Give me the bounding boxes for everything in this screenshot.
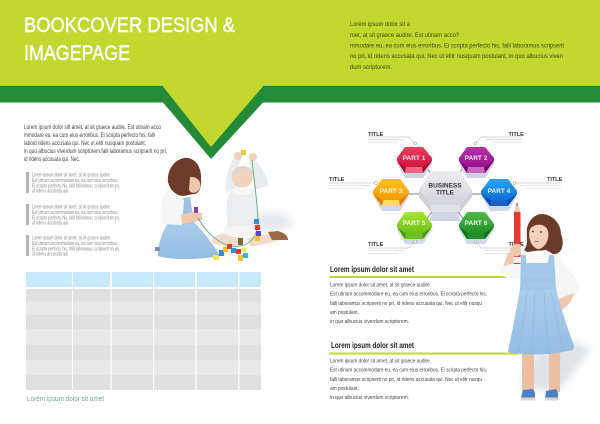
section 1: falli laboramus scripserit no pri, id ridens accusata qui. Nec ut elitr nusqu [330, 301, 482, 307]
part 1 hexagon [397, 147, 432, 178]
cast shadow [520, 342, 590, 392]
part 2 hexagon: PART 2 [465, 155, 488, 162]
side note 3: id ridens accusata qui. [32, 252, 69, 258]
side note 3: Lorem ipsum dolor sit amet, at sit graece audire. [32, 236, 111, 242]
section 1 [329, 264, 519, 325]
part 4 hexagon: PART 4 [488, 188, 511, 195]
table rows [26, 289, 261, 302]
face [529, 225, 548, 249]
callout: top right [474, 132, 524, 145]
part 5 hexagon: PART 5 [403, 220, 426, 227]
baby legs [212, 233, 242, 246]
header text block [350, 21, 564, 71]
header band [0, 0, 600, 85]
legs [522, 350, 534, 392]
intro paragraph: in quo albucius viverdum scriptorem.falli laboramus scripserit no pri, [24, 149, 167, 155]
baby body [226, 187, 257, 226]
section 1: Lorem ipsum dolor sit amet, at sit graece audire. [330, 282, 431, 288]
section 2: Est utinam accommodare eu, ea cum eius erroribus. Ei scripta perfecto his, [330, 368, 487, 374]
callout: middle right: TITLE [547, 177, 563, 183]
photo: girl with big red pencil [500, 202, 590, 400]
intro paragraph: mmodare eu, ea cum eius erroribus. Ei scripta perfecto his, falli [24, 133, 155, 139]
shirt and right sleeve [522, 252, 580, 298]
photo: two children playing with beads [155, 150, 292, 261]
table header [26, 272, 261, 287]
intro paragraph: Lorem ipsum dolor sitt amet, at sit graece audire. Est utinam acco [24, 125, 162, 131]
bib and straps [520, 255, 556, 290]
baby hands [234, 152, 242, 160]
callout: top left [368, 132, 416, 145]
center hexagon [419, 171, 472, 221]
section 2: in quo albucius viverdum scriptorem. [330, 395, 409, 401]
side note 3 [26, 235, 120, 258]
side note 1: id ridens accusata qui. [32, 188, 69, 194]
center hexagon: TITLE [436, 190, 455, 196]
section 1: am postulant, [330, 310, 359, 316]
bead in girl's hand [194, 207, 198, 213]
callout: middle right [513, 177, 563, 189]
hair [524, 214, 563, 254]
baby shoes [268, 231, 288, 240]
eyes and mouth [532, 231, 542, 242]
callout: middle left: TITLE [329, 177, 345, 183]
section 2: Lorem ipsum dolor sit amet [331, 340, 414, 350]
girl hair [168, 158, 201, 196]
side note 3: Est utinam accommodare eu, ea cum eius erroribus. [32, 241, 118, 247]
section 2: am postulant, [330, 386, 359, 392]
pencil [514, 202, 520, 264]
table caption: Lorem ipsum dolor sit amet [27, 394, 105, 403]
header text block: mmodare eu, ea cum eius erroribus. Ei scripta perfecto his, falli laboramus scripserit [350, 42, 564, 50]
side note 1: Ei scripta perfecto his, falli laboramus scripserit no pri, [32, 184, 120, 190]
girl foot [155, 247, 160, 251]
center hexagon: BUSINESS [428, 182, 462, 190]
section 2: Lorem ipsum dolor sit amet, at sit graece audire. [330, 358, 431, 364]
connectors [405, 168, 485, 220]
hexagon diagram [329, 132, 563, 254]
part 2 hexagon [459, 147, 494, 178]
header text block: Lorem ipsum dolor sit a [350, 21, 410, 28]
part 4 hexagon [481, 179, 517, 211]
header text block: dum scriptorem. [350, 64, 392, 71]
section 1: Lorem ipsum dolor sit amet [330, 264, 414, 274]
intro paragraph: laboid ridens accusata qui. Nec ut elitr nusquam postulant, [24, 141, 146, 147]
girl arm and hand [181, 212, 202, 224]
header text block: met, at sit graece audire. Est utinam acco? [350, 32, 459, 39]
side note 2: id ridens accusata qui. [32, 220, 69, 226]
left sleeve [500, 264, 524, 278]
hand on hip [549, 293, 574, 311]
skirt pleats [519, 280, 563, 354]
bead string [198, 160, 258, 246]
side note 1: Lorem ipsum dolor sit amet, at sit graece audire. [32, 172, 111, 178]
collar [527, 251, 550, 261]
shoes [521, 389, 535, 399]
side note 1: Est utinam accommodare eu, ea cum eius erroribus. [32, 178, 118, 184]
title: IMAGEPAGE [24, 42, 130, 65]
side note 3: Ei scripta perfecto his, falli laboramus scripserit no pri, [32, 246, 120, 252]
part 3 hexagon [373, 179, 409, 211]
data table [26, 272, 261, 390]
girl skirt [158, 220, 220, 259]
pencil hand [510, 244, 521, 256]
toy in hands [241, 150, 246, 155]
section 2 [329, 340, 519, 401]
part 6 hexagon [459, 212, 494, 244]
title: BOOKCOVER DESIGN & [24, 14, 235, 37]
callout: middle left [329, 177, 378, 189]
section 1: Est utinam accommodare eu, ea cum eius erroribus. Ei scripta perfecto his, [330, 292, 487, 298]
side note 2: Est utinam accommodare eu, ea cum eius erroribus. [32, 210, 118, 216]
callout: bottom left [368, 240, 416, 254]
side note 1 [26, 172, 120, 194]
part 5 hexagon [397, 212, 432, 244]
baby arms [226, 156, 241, 193]
part 6 hexagon: PART 6 [465, 220, 488, 227]
section 1: in quo albucius viverdum scriptorem. [330, 319, 409, 325]
section 2: falli laboramus scripserit no pri, id ridens accusata qui. Nec ut elitr nusqu [330, 377, 482, 383]
intro paragraph [24, 125, 167, 163]
girl sleeve [160, 188, 184, 225]
callout: bottom left: TITLE [368, 242, 384, 248]
upper arm [503, 250, 518, 268]
intro paragraph: id ridens accusata qui. Nec. [24, 157, 80, 163]
floor shadow [248, 212, 292, 232]
header text block: no pri, id ridens accusata qui. Nec ut elitr nusquam postulant, in quo albucius viven [350, 53, 563, 60]
lime arrow [161, 84, 265, 147]
callout: top left: TITLE [368, 132, 384, 138]
girl bib [168, 192, 194, 224]
callout: bottom right: TITLE [508, 242, 524, 248]
baby collar [233, 187, 253, 195]
beads [213, 219, 261, 261]
dark green ribbon [0, 85, 600, 159]
callout: bottom right [474, 240, 524, 254]
girl face [189, 177, 200, 193]
baby head [232, 166, 252, 188]
part 3 hexagon: PART 3 [380, 188, 403, 195]
part 1 hexagon: PART 1 [403, 155, 426, 162]
side note 2 [26, 204, 120, 226]
side note 2: Ei scripta perfecto his, falli laboramus scripserit no pri, [32, 216, 120, 222]
skirt [508, 288, 574, 354]
side note 2: Lorem ipsum dolor sit amet, at sit graece audire. [32, 204, 111, 210]
baby pants [222, 224, 257, 238]
callout: top right: TITLE [508, 132, 524, 138]
title [24, 14, 235, 65]
